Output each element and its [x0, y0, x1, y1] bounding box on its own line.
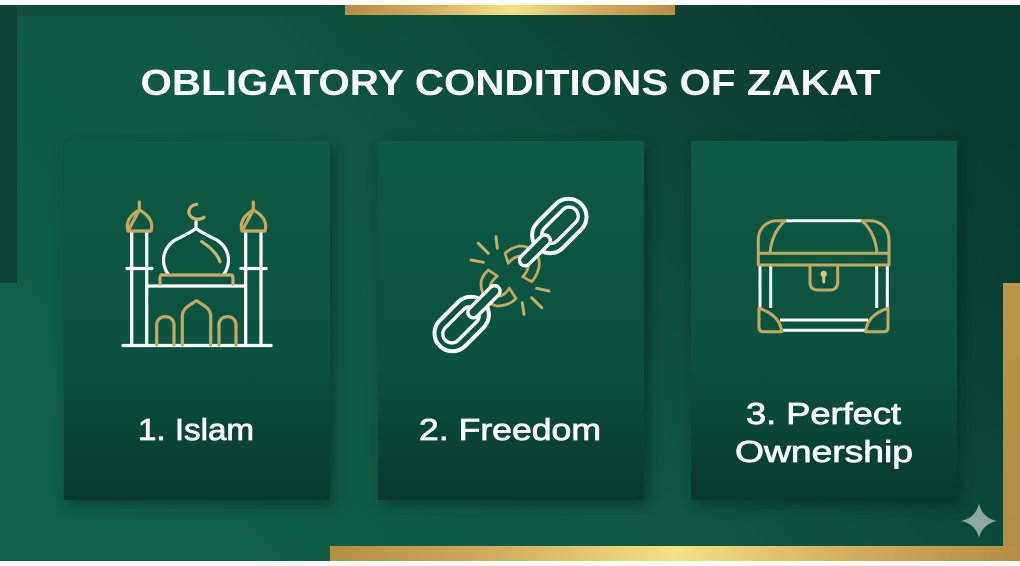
panel: Perfect Ownership — [691, 141, 961, 505]
icon: broken chain — [427, 191, 594, 359]
label: Perfect Ownership: Ownership — [735, 434, 913, 469]
bottom gold bar — [330, 546, 1020, 561]
label: Perfect Ownership — [735, 396, 913, 469]
icon: sparkle — [961, 503, 997, 538]
title: OBLIGATORY CONDITIONS OF ZAKAT — [140, 62, 880, 103]
label: Islam: 1. Islam — [138, 412, 254, 447]
right gold bar — [1003, 283, 1020, 561]
top gold bar — [345, 5, 675, 15]
label: Perfect Ownership: 3. Perfect — [746, 396, 901, 431]
panel: Islam — [64, 141, 334, 505]
panel: Freedom — [378, 141, 648, 505]
label: Freedom: 2. Freedom — [419, 412, 601, 447]
icon: treasure chest — [758, 221, 889, 332]
icon: mosque — [123, 202, 271, 346]
